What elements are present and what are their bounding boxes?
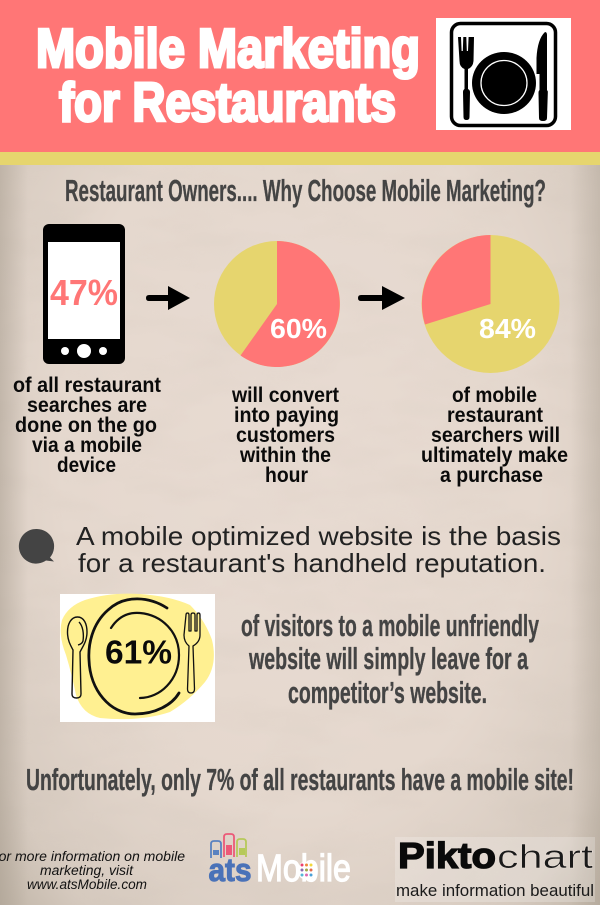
stat 61%: 61% [105, 634, 172, 670]
icon: plate with fork and knife [436, 18, 571, 130]
title [36, 17, 420, 133]
caption: via a mobile [32, 434, 142, 457]
caption [13, 374, 161, 477]
atsMobile logo [208, 834, 351, 890]
caption: will convert [231, 384, 339, 407]
caption: within the [239, 444, 331, 467]
caption: of all restaurant [13, 374, 161, 397]
statement text: A mobile optimized website is the basis [76, 521, 561, 551]
plate rings [89, 599, 179, 714]
caption [421, 384, 568, 487]
footer note: marketing, visit [40, 863, 134, 878]
header banner [0, 0, 600, 165]
caption: a purchase [440, 464, 543, 487]
caption: done on the go [15, 414, 157, 437]
arrow [146, 286, 190, 310]
Piktochart logo [395, 835, 595, 902]
Piktochart logo: Pikto [398, 835, 496, 876]
footer note [0, 849, 185, 892]
statement text [76, 521, 561, 578]
footer note: www.atsMobile.com [27, 877, 147, 892]
panel: 84% pie statistic [421, 235, 568, 487]
caption [231, 384, 339, 487]
caption: ultimately make [421, 444, 568, 467]
caption: device [57, 454, 116, 477]
Piktochart logo: chart [497, 838, 593, 875]
stat 60%: 60% [270, 313, 327, 344]
panel: 47% phone statistic [13, 224, 161, 477]
icon: smartphone [43, 224, 125, 364]
panel: 60% pie statistic [214, 241, 340, 487]
Piktochart logo: make information beautiful [396, 881, 594, 900]
atsMobile logo: Mobile [256, 848, 351, 890]
icon: fork [184, 613, 200, 693]
caption: restaurant [447, 404, 543, 427]
caption: of mobile [452, 384, 537, 407]
stat 84%: 84% [479, 313, 536, 344]
caption: customers [236, 424, 335, 447]
yellow blob [61, 594, 214, 719]
title: Mobile Marketing [36, 17, 420, 79]
pie chart 84% [422, 235, 560, 373]
caption: hour [265, 464, 308, 487]
caption: searches are [27, 394, 147, 417]
panel: 61% plate illustration [60, 594, 215, 722]
caption: searchers will [431, 424, 560, 447]
caption: into paying [234, 404, 339, 427]
logo phones [211, 834, 246, 858]
stat 47%: 47% [50, 272, 118, 313]
visitor statement text [241, 608, 539, 710]
visitor statement text: competitor’s website. [288, 675, 487, 710]
atsMobile logo: ats [208, 852, 252, 888]
icon: spoon [68, 617, 87, 698]
title: for Restaurants [59, 71, 396, 133]
statement text: for a restaurant's handheld reputation. [78, 548, 546, 578]
icon: speech bubble [19, 529, 54, 564]
pie chart 60% [214, 241, 340, 367]
logo dots [299, 862, 314, 879]
arrow [358, 286, 405, 310]
